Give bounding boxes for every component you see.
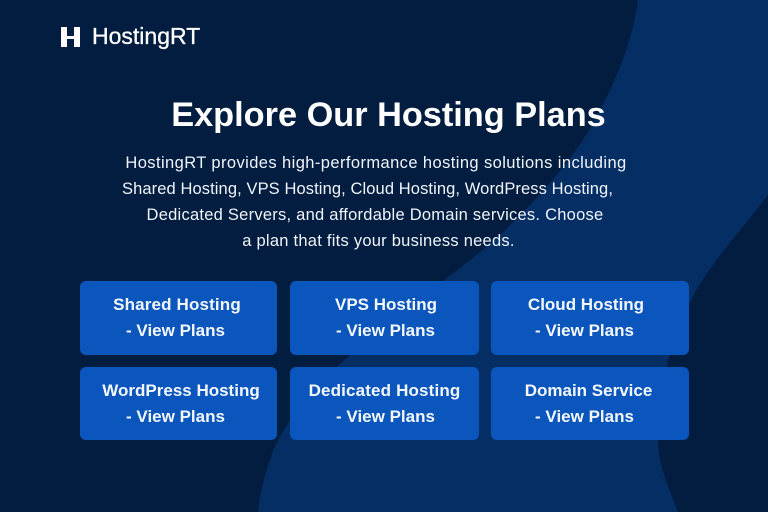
description text: Shared Hosting, VPS Hosting, Cloud Hosting, WordPress Hosting, (122, 180, 613, 198)
button: Domain Service: - View Plans (535, 407, 634, 426)
button: Dedicated Hosting (290, 367, 479, 440)
description text: a plan that fits your business needs. (242, 232, 515, 250)
button: Cloud Hosting (491, 281, 689, 355)
description text: HostingRT provides high-performance hosting solutions including (125, 154, 627, 172)
button: Dedicated Hosting: Dedicated Hosting (309, 381, 460, 400)
button: Cloud Hosting: Cloud Hosting (528, 295, 644, 314)
button: Shared Hosting: - View Plans (126, 321, 225, 340)
description text (122, 154, 627, 250)
button: VPS Hosting (290, 281, 479, 355)
icon: logo mark (61, 27, 80, 47)
button: WordPress Hosting: - View Plans (126, 407, 225, 426)
button: WordPress Hosting (80, 367, 277, 440)
button: Domain Service: Domain Service (525, 381, 652, 400)
logo (61, 23, 200, 50)
button: WordPress Hosting: WordPress Hosting (102, 381, 260, 400)
title: Explore Our Hosting Plans (171, 96, 606, 134)
button: Shared Hosting (80, 281, 277, 355)
description text: Dedicated Servers, and affordable Domain services. Choose (147, 206, 603, 224)
button: VPS Hosting: VPS Hosting (335, 295, 437, 314)
button: Cloud Hosting: - View Plans (535, 321, 634, 340)
button: Shared Hosting: Shared Hosting (113, 295, 241, 314)
button: Domain Service (491, 367, 689, 440)
brand name: HostingRT (92, 23, 200, 49)
button: VPS Hosting: - View Plans (336, 321, 435, 340)
button: Dedicated Hosting: - View Plans (336, 407, 435, 426)
